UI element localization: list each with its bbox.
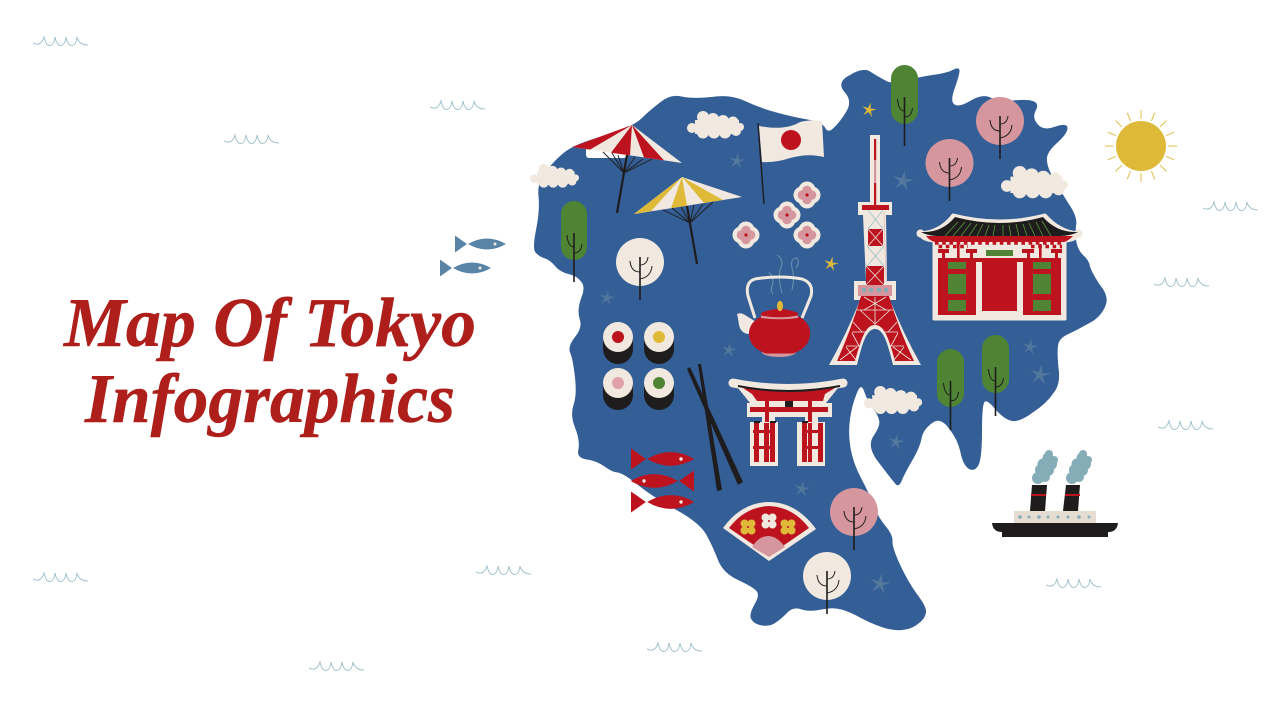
under-eave bbox=[926, 236, 1073, 242]
sushi: red bbox=[603, 322, 633, 364]
icon: folding fan bbox=[723, 502, 816, 561]
temple silhouette bbox=[920, 215, 1079, 319]
green windows bbox=[948, 262, 1051, 311]
spout bbox=[737, 313, 756, 334]
icon: Tokyo tower bbox=[829, 135, 921, 365]
icon: cherry blossoms bbox=[732, 182, 820, 248]
checker strip bbox=[935, 241, 1064, 245]
hull bbox=[992, 523, 1118, 537]
torii roof bbox=[743, 388, 835, 401]
tree: pink round bottom bbox=[830, 488, 878, 550]
cabin bbox=[1014, 511, 1096, 523]
funnels bbox=[1030, 485, 1047, 511]
title: Map Of Tokyo bbox=[63, 285, 476, 362]
observation deck bbox=[858, 285, 892, 296]
knob bbox=[777, 301, 783, 311]
icon: temple gate bbox=[916, 215, 1082, 319]
sushi: pink bbox=[603, 368, 633, 410]
tree: pink round top right bbox=[976, 97, 1024, 159]
icon: teapot bbox=[737, 255, 812, 357]
smoke bbox=[1032, 450, 1092, 484]
clouds bbox=[530, 111, 1068, 414]
fan flower white bbox=[762, 514, 776, 528]
tree: cream round bbox=[616, 238, 664, 300]
trees bbox=[561, 65, 1024, 614]
handle bbox=[747, 277, 812, 318]
roof tiles bbox=[921, 217, 1078, 236]
icon: steamship bbox=[992, 450, 1118, 537]
top platform bbox=[862, 205, 889, 210]
fan flower yellow right bbox=[780, 520, 796, 534]
icon: torii gate bbox=[733, 383, 843, 466]
title bbox=[63, 285, 476, 438]
icon: red umbrella bbox=[572, 125, 682, 213]
tower legs bbox=[837, 296, 914, 361]
icon: yellow umbrella bbox=[634, 177, 742, 264]
map stars bbox=[599, 151, 1052, 595]
icon: red fish bbox=[631, 448, 694, 513]
pot body bbox=[762, 347, 796, 357]
upper lattice bbox=[868, 229, 883, 246]
tree: cream round bottom bbox=[803, 552, 851, 614]
antenna bbox=[874, 139, 876, 160]
sushi: yellow bbox=[644, 322, 674, 364]
green sign bbox=[986, 250, 1013, 256]
torii post caps bbox=[754, 421, 808, 423]
torii cream backing bbox=[733, 383, 843, 466]
icon: sun bbox=[1105, 110, 1177, 182]
sushi: green bbox=[644, 368, 674, 410]
icon: Japanese flag bbox=[758, 120, 824, 204]
torii beams bbox=[750, 395, 828, 462]
steam bbox=[769, 255, 798, 294]
icon: sushi rolls bbox=[603, 322, 674, 410]
title: Infographics bbox=[84, 361, 455, 438]
tree: green capsule lower two bbox=[982, 335, 1009, 416]
icon: chopsticks bbox=[687, 364, 743, 491]
red walls bbox=[938, 258, 1061, 315]
tree: pink round centre bbox=[926, 139, 974, 201]
brackets bbox=[938, 244, 1062, 258]
icon: blue fish bbox=[440, 236, 506, 276]
fan flower yellow left bbox=[740, 520, 756, 534]
yellow stars bbox=[822, 101, 878, 272]
tree: green capsule lower one bbox=[937, 349, 964, 430]
tree: green capsule left bbox=[561, 201, 587, 282]
tree: green capsule top bbox=[891, 65, 918, 146]
map of Tokyo bbox=[534, 68, 1107, 630]
